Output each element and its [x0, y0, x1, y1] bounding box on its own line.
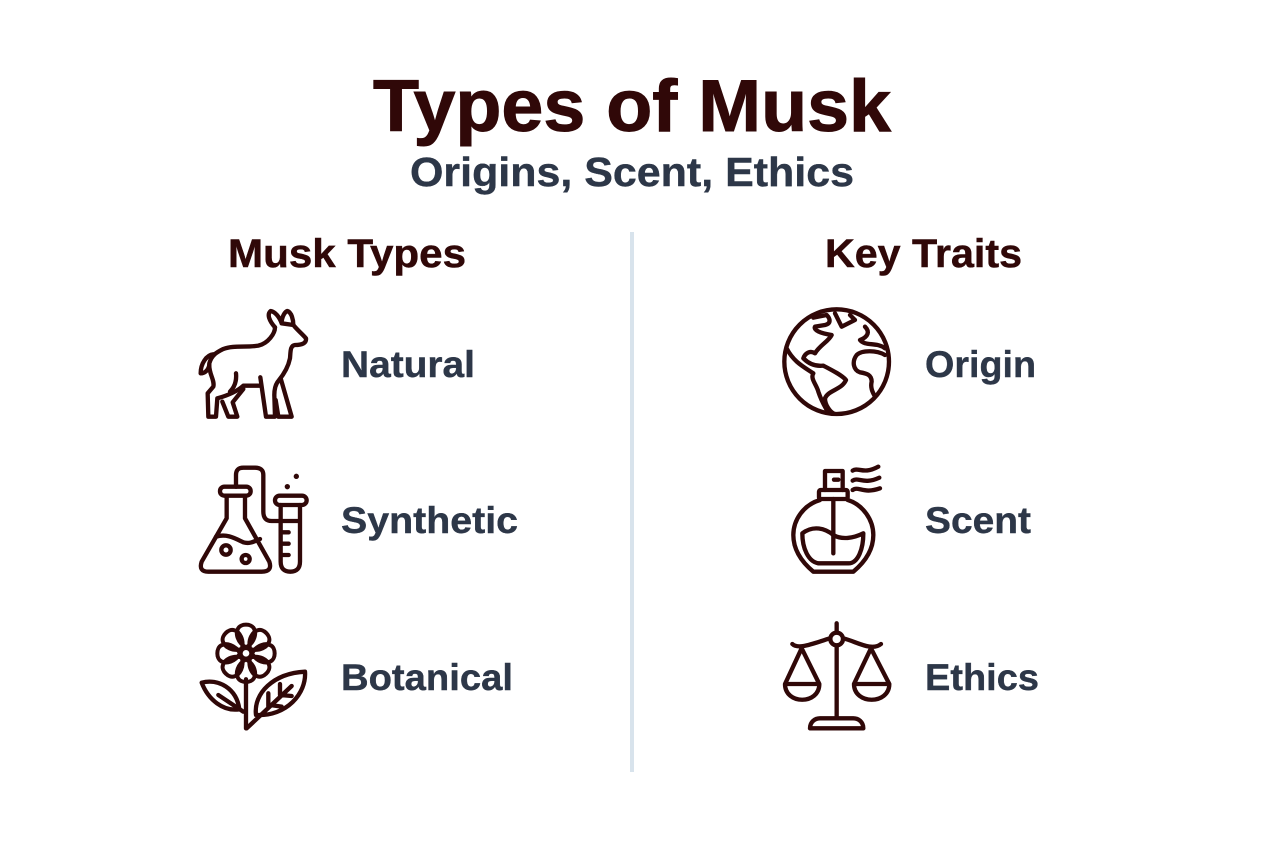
label: origin: Origin	[925, 344, 1036, 385]
icon: globe	[784, 309, 889, 414]
label: natural: Natural	[341, 344, 475, 385]
icon: lab flask and test tube	[201, 468, 307, 572]
label: botanical: Botanical	[341, 657, 513, 698]
label: ethics: Ethics	[925, 657, 1039, 698]
icon: balance scales	[785, 623, 889, 728]
panel: key traits	[784, 232, 1039, 728]
divider between columns	[630, 232, 634, 772]
label: scent: Scent	[925, 500, 1031, 541]
title: Types of Musk	[373, 66, 891, 147]
icon: deer	[201, 311, 306, 417]
icon: perfume bottle	[793, 467, 880, 572]
heading: musk types: Musk Types	[228, 232, 466, 276]
panel: musk types	[201, 232, 518, 728]
heading: key traits: Key Traits	[825, 232, 1022, 276]
subtitle: Origins, Scent, Ethics	[410, 149, 854, 195]
icon: flower with leaves	[202, 625, 305, 728]
label: synthetic: Synthetic	[341, 500, 518, 541]
